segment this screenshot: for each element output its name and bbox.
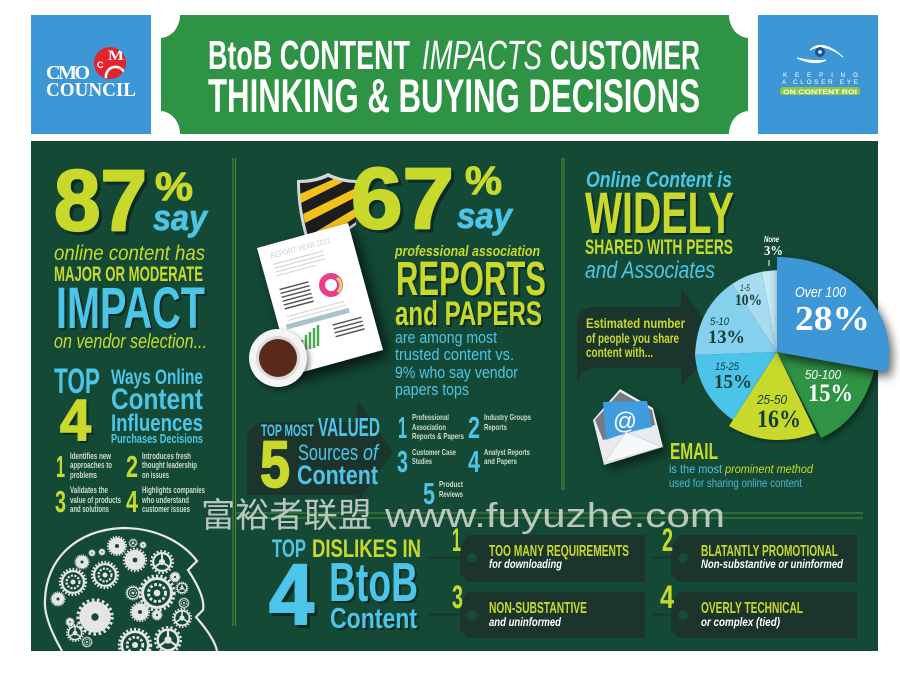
pie slice: 25-50 16% <box>729 352 816 440</box>
left column: 87 percent stat: on vendor selection... <box>54 331 207 353</box>
logo panel: keeping a closer eye: KEEPING <box>783 72 858 79</box>
left column: 87 percent stat: say <box>153 197 209 238</box>
logo panel: keeping a closer eye: A CLOSER EYE <box>782 79 859 86</box>
middle column: 67 percent stat <box>351 151 546 399</box>
middle column: 67 percent stat: % <box>465 159 502 203</box>
text: estimated number <box>586 315 685 360</box>
tag 2: blatantly promotional <box>652 522 857 582</box>
left column: four ways list: 1 <box>56 449 65 484</box>
pie slice: 1-5 10% <box>732 272 777 352</box>
icon: head with gears <box>45 528 217 661</box>
title banner: IMPACTS <box>422 32 542 78</box>
left column: four ways list: who understand <box>141 495 189 505</box>
left column: 87 percent stat: % <box>155 165 193 209</box>
text: estimated number: Estimated number <box>586 315 685 331</box>
icon: striped shield <box>297 173 358 240</box>
heading: top most valued 5 sources of content: Sources <box>298 440 358 465</box>
tag 1: too many requirements: for downloading <box>489 557 563 571</box>
left column: four ways list: Introduces fresh <box>142 451 191 461</box>
middle column: 67 percent stat: papers tops <box>395 380 469 399</box>
middle column: 67 percent stat: trusted content vs. <box>395 345 514 364</box>
heading: top most valued 5 sources of content: Content <box>297 460 378 490</box>
tag 4: overly technical: OVERLY TECHNICAL <box>701 600 803 617</box>
middle column: 67 percent stat: and PAPERS <box>395 295 542 333</box>
pie slice: none 3% <box>762 270 777 352</box>
left column: four ways list <box>55 449 205 519</box>
left column: 87 percent stat: IMPACT <box>56 276 205 341</box>
left column: four ways list: customer issues <box>142 504 190 514</box>
logo panel: CMO Council: M <box>108 48 124 64</box>
title banner: BtoB CONTENT <box>208 32 410 78</box>
left column: four ways list: and solutions <box>70 504 109 514</box>
left column: four ways list: Highlights companies <box>142 485 205 495</box>
tag 1: too many requirements: TOO MANY REQUIREMENTS <box>489 543 629 560</box>
heading: top dislikes in 4 BtoB content: TOP <box>272 535 306 563</box>
list: five sources: Customer Case <box>412 447 456 457</box>
heading: top most valued 5 sources of content: VALUED <box>318 412 380 442</box>
left column: four ways list: value of products <box>70 495 121 505</box>
middle column: 67 percent stat: say <box>457 195 514 236</box>
list: five sources: Reports & Papers <box>412 431 464 441</box>
heading: top most valued 5 sources of content <box>260 412 380 501</box>
text: estimated number: of people you share <box>586 330 679 346</box>
tag 4: overly technical: 4 <box>660 579 674 615</box>
logo panel: CMO Council: CMO <box>46 62 90 84</box>
list: five sources <box>397 410 531 511</box>
list: five sources: 5 <box>423 476 435 511</box>
text: estimated number: content with... <box>586 344 653 360</box>
heading: top dislikes in 4 BtoB content: 4 <box>269 547 314 643</box>
left column: four ways list: 4 <box>126 484 139 519</box>
text: email callout: prominent method <box>724 462 813 476</box>
middle column: 67 percent stat: professional association <box>394 243 540 260</box>
pie chart <box>695 235 889 440</box>
tag 3: non-substantive: NON-SUBSTANTIVE <box>489 600 587 617</box>
list: five sources: Studies <box>412 456 432 466</box>
pie labels: 25-50 <box>756 392 788 407</box>
logo panel: CMO Council: C <box>97 60 104 70</box>
pie slice: 15-25 15% <box>695 352 777 420</box>
watermark: 富裕者联盟 <box>201 497 372 535</box>
text: email callout: used for sharing online content <box>669 476 803 490</box>
watermark: www.fuyuzhe.com <box>384 497 725 535</box>
text: email callout <box>669 438 813 490</box>
list: five sources: 4 <box>468 444 481 479</box>
left column: 87 percent stat <box>54 153 209 353</box>
illustration: report document <box>257 223 383 375</box>
list: five sources: Analyst Reports <box>484 447 530 457</box>
left column: four ways list: approaches to <box>70 460 112 470</box>
list: five sources: and Papers <box>484 456 517 466</box>
left column: top 4 ways heading: Purchases Decisions <box>111 431 203 446</box>
right column heading <box>585 167 734 284</box>
list: five sources: 2 <box>468 410 480 445</box>
pie labels: 1-5 <box>740 283 751 293</box>
tag 3: non-substantive: and uninformed <box>489 615 562 629</box>
title banner <box>161 15 748 134</box>
logo panel: keeping a closer eye <box>758 15 878 134</box>
left column: 87 percent stat: online content has <box>54 242 205 265</box>
logo panel: keeping a closer eye: ON CONTENT ROI <box>783 89 857 96</box>
heading: top most valued 5 sources of content: of <box>363 440 380 465</box>
pie labels <box>708 235 870 433</box>
title banner: CUSTOMER <box>550 32 700 78</box>
main dark green panel <box>31 141 878 651</box>
left column: four ways list: Identifies new <box>70 451 112 461</box>
tag 1: too many requirements <box>428 522 645 582</box>
middle column: 67 percent stat: are among most <box>395 328 497 347</box>
left column: top 4 ways heading: Ways Online <box>111 366 203 389</box>
icon: email envelope: @ <box>613 408 637 435</box>
right column heading: and Associates <box>585 257 715 284</box>
list: five sources: Reports <box>484 422 507 432</box>
list: five sources: Professional <box>412 412 449 422</box>
illustration: report document: REPORT YEAR 2012 <box>269 236 332 261</box>
middle column: 67 percent stat: REPORTS <box>396 253 546 306</box>
pie labels: 15% <box>808 380 853 407</box>
pie labels: 50-100 <box>805 367 842 382</box>
text: email callout: EMAIL <box>670 438 718 464</box>
tag 3: non-substantive <box>428 579 645 638</box>
middle column: 67 percent stat: 67 <box>351 151 454 247</box>
left column: four ways list: 2 <box>126 449 138 484</box>
list: five sources: Association <box>412 422 446 432</box>
left column: top 4 ways heading: Influences <box>111 410 203 437</box>
left column: four ways list: Validates the <box>70 485 108 495</box>
pie labels: 15% <box>714 371 752 393</box>
tag 4: overly technical <box>652 579 857 638</box>
heading: top dislikes in 4 BtoB content <box>269 535 421 643</box>
logo panel: CMO Council: COUNCIL <box>46 79 136 101</box>
pie labels: 15-25 <box>715 361 740 373</box>
left column: four ways list: on issues <box>142 470 169 480</box>
left column: 87 percent stat: 87 <box>54 153 147 249</box>
left column: four ways list: problems <box>70 470 97 480</box>
text: email callout: is the most <box>669 462 723 476</box>
left column: 87 percent stat: MAJOR OR MODERATE <box>54 263 203 286</box>
left column: top 4 ways heading: Content <box>111 383 203 416</box>
pie slice: 5-10 13% <box>695 284 777 355</box>
list: five sources: 1 <box>398 410 407 445</box>
illustration: coffee cup <box>249 329 307 387</box>
list: five sources: Product <box>439 479 463 489</box>
pie labels: 13% <box>708 327 745 348</box>
icon: email envelope <box>593 389 663 465</box>
heading: top most valued 5 sources of content: 5 <box>260 427 290 501</box>
pie labels: 16% <box>757 406 801 433</box>
arrow: top most valued background <box>247 400 393 503</box>
pie labels: 10% <box>735 292 762 309</box>
middle column: 67 percent stat: 9% who say vendor <box>395 363 518 382</box>
pie labels: 5-10 <box>710 316 730 328</box>
watermark <box>201 497 725 535</box>
list: five sources: Reviews <box>439 489 463 499</box>
tag 2: blatantly promotional: Non-substantive or uninformed <box>701 557 844 571</box>
tag 2: blatantly promotional: 2 <box>662 522 673 558</box>
right column heading: Online Content is <box>586 167 732 192</box>
arrow: estimated number background <box>577 287 712 387</box>
left column: four ways list: thought leadership <box>142 460 197 470</box>
heading: top dislikes in 4 BtoB content: DISLIKES IN <box>312 535 421 563</box>
list: five sources: Industry Groups <box>484 412 531 422</box>
logo panel: CMO Council <box>31 15 151 134</box>
tag 4: overly technical: or complex (tied) <box>701 615 780 629</box>
tag 1: too many requirements: 1 <box>452 522 461 558</box>
heading: top dislikes in 4 BtoB content: BtoB <box>329 551 418 613</box>
left column: top 4 ways heading <box>54 362 203 453</box>
heading: top most valued 5 sources of content: TOP MOST <box>261 421 314 440</box>
pie labels: 3% <box>764 244 783 259</box>
list: five sources: 3 <box>397 444 408 479</box>
pie labels: None <box>764 235 779 244</box>
pie labels: Over 100 <box>795 284 847 301</box>
pie slice: 50-100 15% <box>777 352 875 438</box>
left column: four ways list: 3 <box>55 484 66 519</box>
pie slice: over 100 28% <box>777 257 889 372</box>
right column heading: SHARED WITH PEERS <box>585 236 733 259</box>
pie labels: 28% <box>795 299 870 338</box>
left column: top 4 ways heading: TOP <box>54 362 100 401</box>
heading: top dislikes in 4 BtoB content: Content <box>330 603 417 635</box>
right column heading: WIDELY <box>585 181 734 246</box>
tag 3: non-substantive: 3 <box>452 579 463 615</box>
left column: top 4 ways heading: 4 <box>60 388 91 453</box>
